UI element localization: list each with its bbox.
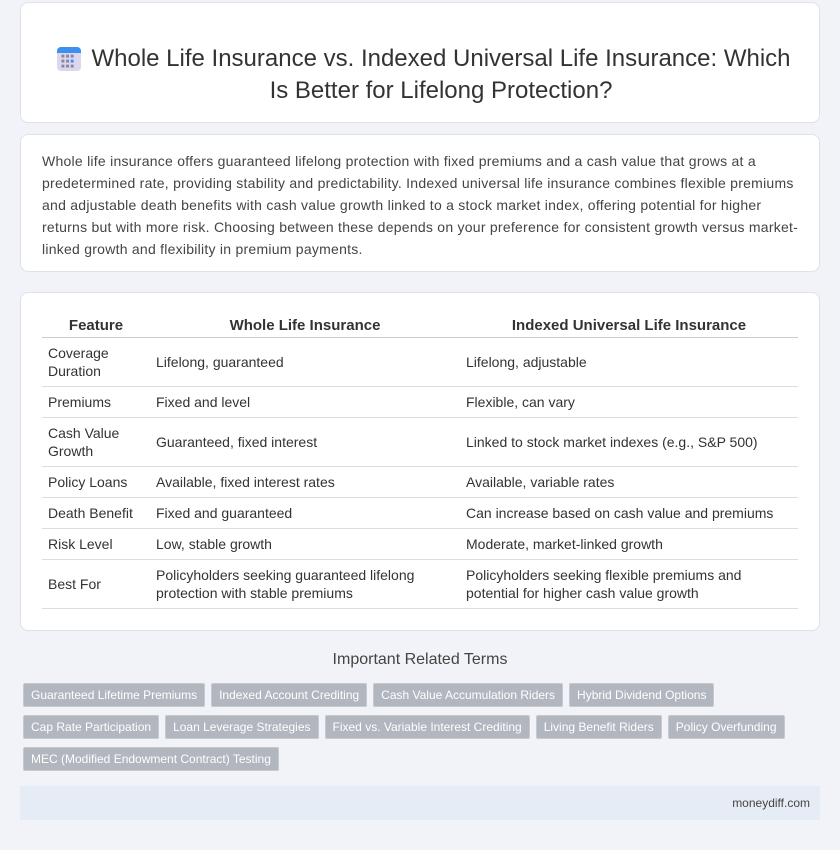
panel: header [20,2,820,123]
table: Available, variable rates [466,474,614,490]
table: Guaranteed, fixed interest [156,434,317,450]
table: Whole Life Insurance [230,317,380,334]
table: Available, fixed interest rates [156,474,335,490]
table: Death Benefit [48,505,133,521]
table: Indexed Universal Life Insurance [512,317,746,334]
footer: moneydiff.com [732,796,810,810]
icon: calendar [57,47,81,71]
table: Flexible, can vary [466,394,575,410]
table: Can increase based on cash value and premiums [466,505,773,521]
panel: comparison table [20,292,820,631]
table: Cash Value Growth [48,425,119,459]
text block: intro: Whole life insurance offers guaranteed lifelong protection with fixed premiums and a cash value that grows at a predetermined rate, providing stability and predictability. Indexed universal life insurance combines flexible premiums and adjustable death benefits with cash value growth linked to a stock market index, offering potential for higher returns but with more risk. Choosing between these depends on your preference for consistent growth versus market-linked growth and flexibility in premium payments. [42,153,798,257]
table: Fixed and guaranteed [156,505,292,521]
tags: Cap Rate Participation [31,720,151,734]
table [42,317,798,609]
table: Low, stable growth [156,536,272,552]
table: Policyholders seeking flexible premiums and potential for higher cash value growth [466,567,741,601]
table: Policy Loans [48,474,127,490]
tags [23,683,785,771]
tags: Policy Overfunding [676,720,776,734]
table: Best For [48,576,101,592]
tags: Loan Leverage Strategies [173,720,311,734]
tags: Guaranteed Lifetime Premiums [31,688,197,702]
table: Lifelong, adjustable [466,354,587,370]
icon: calendar: ■■■ [61,64,75,70]
panel: description [20,134,820,272]
table: Policyholders seeking guaranteed lifelong protection with stable premiums [156,567,414,601]
table: Premiums [48,394,111,410]
table: Feature [69,317,123,334]
tags: Fixed vs. Variable Interest Crediting [333,720,522,734]
tags: MEC (Modified Endowment Contract) Testing [31,752,271,766]
icon: calendar: ■■■ [61,54,75,60]
table: Risk Level [48,536,113,552]
table: Lifelong, guaranteed [156,354,284,370]
tags: Indexed Account Crediting [219,688,359,702]
footer [20,786,820,820]
tags: Cash Value Accumulation Riders [381,688,555,702]
icon: calendar: ■■■ [61,59,75,65]
heading: related terms: Important Related Terms [333,651,507,668]
title: Whole Life Insurance vs. Indexed Universal Life Insurance: Which Is Better for Lifelong Protection? [91,45,790,104]
table: Linked to stock market indexes (e.g., S&P 500) [466,434,758,450]
table: Moderate, market-linked growth [466,536,663,552]
table: Fixed and level [156,394,250,410]
tags: Hybrid Dividend Options [577,688,706,702]
table: Coverage Duration [48,345,109,379]
tags: Living Benefit Riders [544,720,654,734]
